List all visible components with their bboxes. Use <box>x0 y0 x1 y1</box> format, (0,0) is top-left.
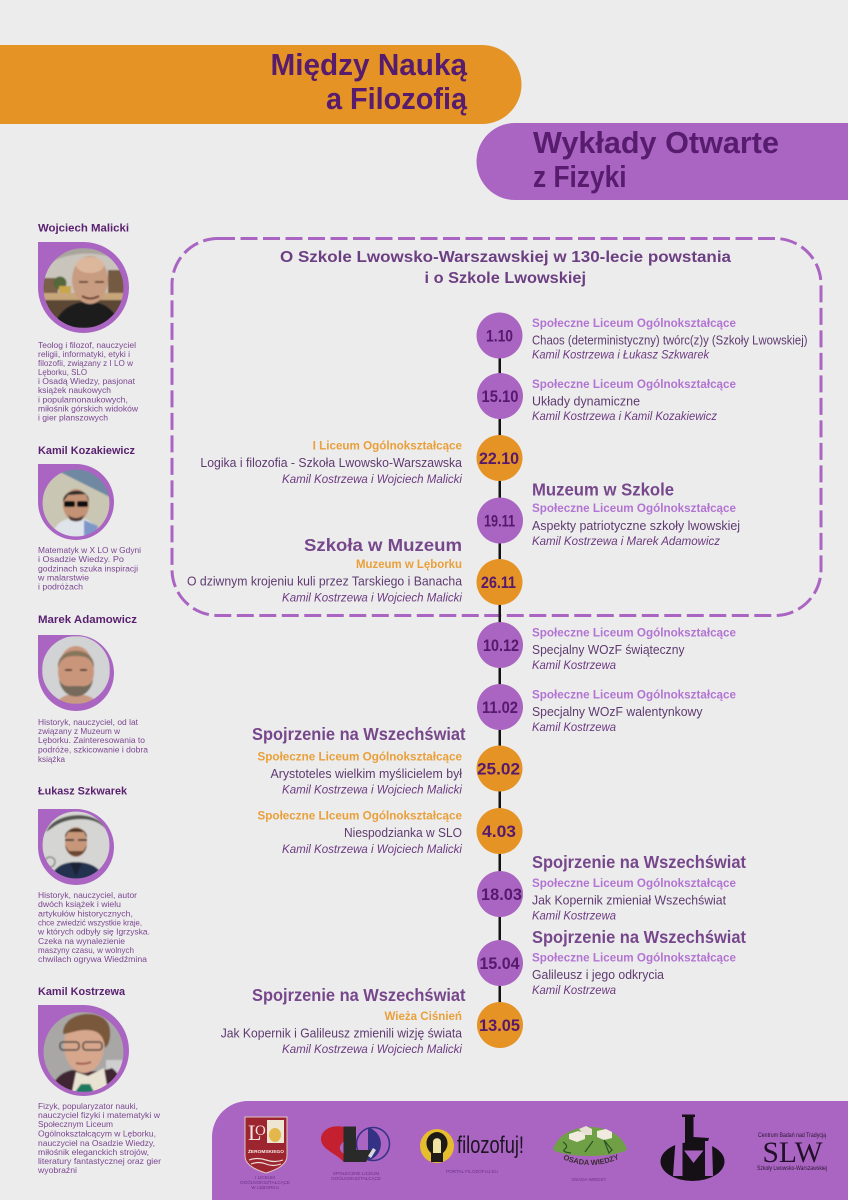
date: 13.05: 13.05 <box>479 1017 520 1035</box>
event: Jak Kopernik i Galileusz: Spojrzenie na Wszechświat <box>252 985 466 1005</box>
event: Układy dynamiczne: Kamil Kostrzewa i Kamil Kozakiewicz <box>532 411 717 423</box>
date: 26.11 <box>476 559 522 605</box>
bio: Kamil Kozakiewicz: i Osadzie Wiedzy. Po <box>38 554 124 564</box>
bio: Kamil Kozakiewicz: i podróżach <box>38 582 83 592</box>
event: Chaos: Kamil Kostrzewa i Łukasz Szkwarek <box>532 350 710 362</box>
date: 13.05 <box>477 1002 523 1048</box>
date: 22.10: 22.10 <box>479 450 519 468</box>
bio: Łukasz Szkwarek: maszyny czasu, w wolnych <box>38 945 134 955</box>
bio: Marek Adamowicz: związany z Muzeum w <box>38 726 121 736</box>
event: Jak Kopernik: Jak Kopernik zmieniał Wszechświat <box>532 894 727 908</box>
date: 11.02: 11.02 <box>482 699 518 717</box>
date: 25.02 <box>476 746 522 792</box>
bio: Łukasz Szkwarek: chwilach ogrywa Wiedźmina <box>38 954 147 964</box>
event: WOzF walentynkowy <box>532 690 736 734</box>
bio: Kamil Kostrzewa: nauczyciel fizyki i matematyki w <box>38 1110 161 1120</box>
event: Chaos <box>532 318 808 362</box>
portrait: Łukasz Szkwarek <box>38 809 114 885</box>
date: 19.11 <box>477 498 523 544</box>
event: Jak Kopernik i Galileusz: Jak Kopernik i Galileusz zmienili wizję świata <box>221 1026 462 1040</box>
bio: Marek Adamowicz: podróże, szkicowanie i dobra <box>38 744 148 754</box>
logo: Centrum Badań SLW: Szkoły Lwowsko-Warszawskiej <box>757 1166 827 1172</box>
date: 15.04 <box>477 940 523 986</box>
date: 1.10 <box>476 312 522 358</box>
event: Galileusz <box>532 927 746 997</box>
event: Chaos: Społeczne Liceum Ogólnokształcące <box>532 318 736 330</box>
event: Jak Kopernik: Kamil Kostrzewa <box>532 910 616 922</box>
speaker: Wojciech Malicki: Wojciech Malicki <box>38 222 129 234</box>
event: WOzF świąteczny: Kamil Kostrzewa <box>532 660 616 672</box>
event: WOzF walentynkowy: Kamil Kostrzewa <box>532 722 616 734</box>
event: Logika i filozofia: I Liceum Ogólnokształcące <box>313 440 462 452</box>
date: 15.10 <box>477 373 523 419</box>
date: 19.11: 19.11 <box>484 512 515 530</box>
logo: I LO Żeromskiego: O <box>255 1123 266 1139</box>
logo: I LO Żeromskiego: I LICEUM <box>255 1175 275 1180</box>
date: 11.02 <box>477 684 523 730</box>
event: Układy dynamiczne <box>532 379 736 423</box>
bio: Kamil Kozakiewicz <box>37 545 141 592</box>
logo: SLO <box>321 1126 390 1181</box>
logo: Osada Wiedzy: OSADA WIEDZY <box>572 1177 606 1182</box>
event: Niespodzianka: Kamil Kostrzewa i Wojciech Malicki <box>282 844 462 856</box>
event: Układy dynamiczne: Społeczne Liceum Ogólnokształcące <box>532 379 736 391</box>
event: Galileusz: Społeczne Liceum Ogólnokształcące <box>532 952 736 964</box>
portrait: Kamil Kozakiewicz <box>38 464 114 540</box>
logo: filozofuj: PORTAL FILOZOFUJ.EU <box>446 1169 498 1174</box>
bio: Wojciech Malicki: Lęborku, SLO <box>38 367 87 377</box>
footer panel: logos <box>212 1101 848 1200</box>
bio: Kamil Kostrzewa: Fizyk, popularyzator nauki, <box>38 1101 138 1111</box>
bio: Marek Adamowicz: książka <box>38 754 65 764</box>
bio: Łukasz Szkwarek: Historyk, nauczyciel, autor <box>38 890 137 900</box>
event: Szkoła w Muzeum: Szkoła w Muzeum <box>304 535 462 555</box>
bio: Wojciech Malicki <box>38 340 139 422</box>
speaker: Kamil Kozakiewicz <box>37 445 141 592</box>
event: Jak Kopernik i Galileusz: Kamil Kostrzewa i Wojciech Malicki <box>282 1044 462 1056</box>
speaker: Wojciech Malicki <box>38 222 139 422</box>
speaker: Kamil Kozakiewicz: Kamil Kozakiewicz <box>38 445 135 457</box>
date: 18.03: 18.03 <box>481 886 522 904</box>
bio: Łukasz Szkwarek: Czeka na wynalezienie <box>38 936 125 946</box>
bio: Wojciech Malicki: miłośnik górskich widoków <box>38 404 139 414</box>
logo: I LO Żeromskiego: L <box>248 1120 261 1145</box>
event: Niespodzianka: Społeczne LIceum Ogólnokształcące <box>258 810 462 822</box>
date: 25.02: 25.02 <box>477 760 520 778</box>
date: 15.04: 15.04 <box>480 955 520 973</box>
event: Galileusz: Kamil Kostrzewa <box>532 985 616 997</box>
speaker: Kamil Kostrzewa: Kamil Kostrzewa <box>38 986 126 998</box>
frame heading <box>280 249 731 287</box>
event: WOzF świąteczny: Społeczne Liceum Ogólnokształcące <box>532 628 736 640</box>
event: Arystoteles: Spojrzenie na Wszechświat <box>252 724 466 744</box>
date: 15.10: 15.10 <box>482 388 518 406</box>
bio: Marek Adamowicz <box>38 717 148 764</box>
event: Logika i filozofia <box>200 440 462 486</box>
bio: Wojciech Malicki: książek naukowych <box>38 385 111 395</box>
speaker: Kamil Kostrzewa <box>37 986 161 1175</box>
frame heading: i o Szkole Lwowskiej <box>424 270 586 287</box>
frame heading: O Szkole Lwowsko-Warszawskiej w 130-lecie powstania <box>280 249 731 266</box>
bio: Łukasz Szkwarek: w których odbyły się Igrzyska. <box>37 926 150 936</box>
banner: Między Nauką a Filozofią: a Filozofią <box>326 81 468 116</box>
event: Szkoła w Muzeum <box>187 535 462 604</box>
logo: filozofuj <box>420 1129 524 1174</box>
event: Logika i filozofia: Logika i filozofia - Szkoła Lwowsko-Warszawska <box>200 456 462 470</box>
event: Jak Kopernik <box>532 852 746 922</box>
event: Jak Kopernik: Społeczne Liceum Ogólnokształcące <box>532 878 736 890</box>
event: Logika i filozofia: Kamil Kostrzewa i Wojciech Malicki <box>282 474 462 486</box>
portrait: Wojciech Malicki <box>38 242 129 333</box>
event: Muzeum w Szkole: Społeczne Liceum Ogólnokształcące <box>532 503 736 515</box>
bio: Marek Adamowicz: Lęborku. Zainteresowania to <box>38 735 145 745</box>
bio: Łukasz Szkwarek: dwóch książek i wielu <box>38 899 121 909</box>
logo: filozofuj: filozofuj! <box>457 1132 524 1159</box>
logo: I LO Żeromskiego <box>240 1117 290 1190</box>
banner: Między Nauką a Filozofią <box>0 45 522 124</box>
logo: Centrum Badań SLW: Centrum Badań nad Tradycją <box>758 1133 827 1139</box>
date: 4.03: 4.03 <box>482 823 516 841</box>
logo: Osada Wiedzy <box>553 1126 627 1182</box>
event: WOzF walentynkowy: Specjalny WOzF walentynkowy <box>532 705 703 719</box>
dashed frame: Szkoła Lwowsko-Warszawska cycle <box>172 238 821 616</box>
event: WOzF świąteczny: Specjalny WOzF świąteczny <box>532 643 685 657</box>
banner: Wykłady Otwarte z Fizyki <box>476 123 848 200</box>
event: Arystoteles: Społeczne Liceum Ogólnokształcące <box>258 752 462 764</box>
logo: Centrum Badań SLW: SLW <box>762 1136 823 1169</box>
bio: Wojciech Malicki: i gier planszowych <box>38 412 108 422</box>
bio: Łukasz Szkwarek <box>37 890 150 964</box>
speaker: Łukasz Szkwarek <box>37 786 150 964</box>
event: Niespodzianka: Niespodzianka w SLO <box>344 826 462 840</box>
portrait: Marek Adamowicz <box>38 635 114 711</box>
bio: Wojciech Malicki: religii, informatyki, etyki i <box>38 349 130 359</box>
date: 26.11: 26.11 <box>481 574 516 592</box>
logo: Muzeum w Lęborku <box>660 1114 724 1181</box>
event: Jak Kopernik i Galileusz <box>221 985 466 1056</box>
bio: Wojciech Malicki: filozofii, związany z I LO w <box>38 358 134 368</box>
date: 4.03 <box>476 808 522 854</box>
event: WOzF świąteczny <box>532 628 736 672</box>
event: WOzF walentynkowy: Społeczne Liceum Ogólnokształcące <box>532 690 736 702</box>
event: Szkoła w Muzeum: Kamil Kostrzewa i Wojciech Malicki <box>282 592 462 604</box>
bio: Kamil Kostrzewa: nauczyciel na Osadzie Wiedzy, <box>38 1138 155 1148</box>
logo: I LO Żeromskiego: ŻEROMSKIEGO <box>248 1148 284 1155</box>
bio: Kamil Kostrzewa <box>37 1101 161 1175</box>
bio: Kamil Kostrzewa: wyobraźni <box>37 1165 77 1175</box>
event: Układy dynamiczne: Układy dynamiczne <box>532 394 640 408</box>
date: 1.10: 1.10 <box>486 328 513 346</box>
banner: Wykłady Otwarte z Fizyki: z Fizyki <box>533 159 626 194</box>
bio: Kamil Kozakiewicz: Matematyk w X LO w Gdyni <box>38 545 141 555</box>
speaker: Marek Adamowicz: Marek Adamowicz <box>38 614 138 626</box>
logo: Osada Wiedzy: OSADA WIEDZY <box>564 1154 618 1165</box>
event: Galileusz: Galileusz i jego odkrycia <box>532 968 664 982</box>
bio: Kamil Kostrzewa: literatury fantastycznej oraz gier <box>38 1156 161 1166</box>
event: Galileusz: Spojrzenie na Wszechświat <box>532 927 746 947</box>
event: Niespodzianka <box>258 810 462 856</box>
speaker: Marek Adamowicz <box>38 614 148 764</box>
bio: Łukasz Szkwarek: chce zwiedzić wszystkie kraje, <box>38 918 142 928</box>
bio: Wojciech Malicki: i popularnonaukowych, <box>38 394 128 404</box>
event: Arystoteles: Kamil Kostrzewa i Wojciech Malicki <box>282 784 462 796</box>
bio: Kamil Kostrzewa: miłośnik eleganckich strojów, <box>38 1147 149 1157</box>
logo: I LO Żeromskiego: OGÓLNOKSZTAŁCĄCE <box>240 1179 290 1185</box>
date: 10.12: 10.12 <box>483 637 519 655</box>
bio: Marek Adamowicz: Historyk, nauczyciel, od lat <box>38 717 139 727</box>
event: Chaos: Chaos (deterministyczny) twórc(z)y (Szkoły Lwowskiej) <box>532 334 808 348</box>
logo: SLO: SPOŁECZNE LICEUM <box>333 1171 379 1176</box>
date: 22.10 <box>476 435 522 481</box>
portrait: Kamil Kostrzewa <box>38 1005 129 1096</box>
event: Jak Kopernik: Spojrzenie na Wszechświat <box>532 852 746 872</box>
bio: Kamil Kozakiewicz: w malarstwie <box>37 572 89 582</box>
speaker: Łukasz Szkwarek: Łukasz Szkwarek <box>38 786 128 798</box>
date: 10.12 <box>477 622 523 668</box>
event: Arystoteles <box>252 724 466 796</box>
event: Jak Kopernik i Galileusz: Wieża Ciśnień <box>384 1011 462 1023</box>
event: Muzeum w Szkole: Aspekty patriotyczne szkoły lwowskiej <box>532 519 740 533</box>
bio: Łukasz Szkwarek: artykułów historycznych, <box>38 908 133 918</box>
logo: I LO Żeromskiego: W LĘBORKU <box>251 1185 279 1190</box>
event: Arystoteles: Arystoteles wielkim myślicielem był <box>270 767 462 781</box>
bio: Kamil Kostrzewa: Ogólnokształcącym w Lęborku, <box>38 1128 156 1138</box>
event: Muzeum w Szkole <box>532 480 740 548</box>
bio: Wojciech Malicki: Teolog i filozof, nauczyciel <box>38 340 136 350</box>
event: Szkoła w Muzeum: Muzeum w Lęborku <box>356 559 462 571</box>
banner: Wykłady Otwarte z Fizyki: Wykłady Otwarte <box>533 125 779 160</box>
timeline axis <box>498 335 501 1025</box>
bio: Wojciech Malicki: i Osadą Wiedzy, pasjonat <box>38 376 136 386</box>
event: Muzeum w Szkole: Muzeum w Szkole <box>532 480 674 500</box>
event: Muzeum w Szkole: Kamil Kostrzewa i Marek Adamowicz <box>532 536 720 548</box>
date: 18.03 <box>477 871 523 917</box>
bio: Kamil Kozakiewicz: godzinach szuka inspiracji <box>38 564 138 574</box>
logo: SLO: OGÓLNOKSZTAŁCĄCE <box>331 1175 381 1181</box>
bio: Kamil Kostrzewa: Społecznym Liceum <box>38 1119 113 1129</box>
banner: Między Nauką a Filozofią: Między Nauką <box>270 47 468 82</box>
event: Szkoła w Muzeum: O dziwnym krojeniu kuli przez Tarskiego i Banacha <box>187 574 462 588</box>
